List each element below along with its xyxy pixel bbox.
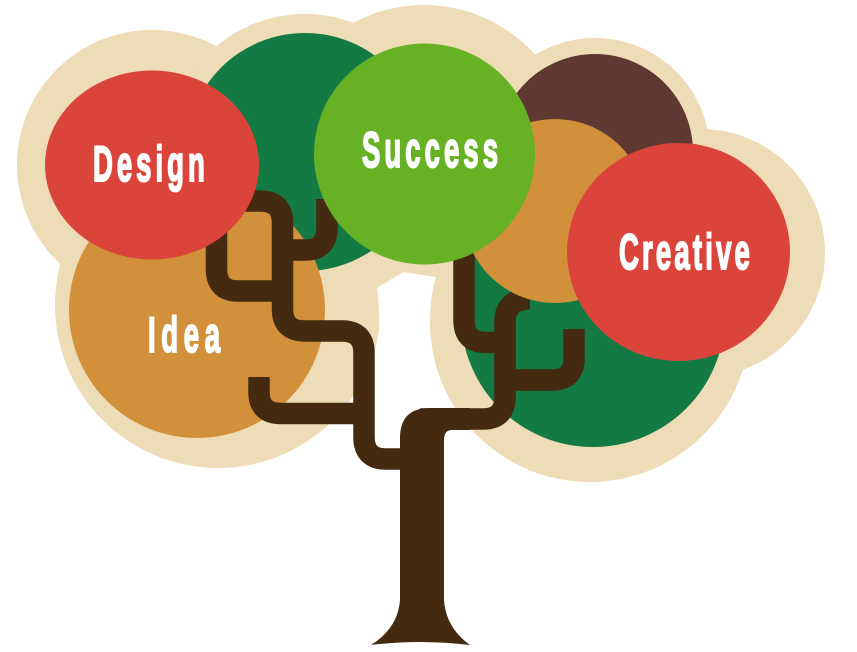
left branches <box>216 199 410 459</box>
orange circle: idea <box>69 182 325 438</box>
branch: left hook right side <box>464 250 505 342</box>
circle: creative <box>567 143 790 361</box>
label: creative: Creative <box>619 223 753 280</box>
dark green circle: top left <box>186 33 424 271</box>
branch: idea hook <box>259 377 364 414</box>
dark green circle: lower right <box>461 183 725 447</box>
trunk <box>371 408 470 645</box>
branch: right main <box>420 299 530 419</box>
label: success: Success <box>362 121 502 178</box>
circle: design <box>45 70 259 260</box>
branch: main left <box>240 201 410 459</box>
branch: top hook <box>282 199 327 250</box>
branch: right hook <box>505 329 574 380</box>
circle: success <box>314 44 535 264</box>
brown circle: top right <box>497 54 693 250</box>
right branches <box>420 250 574 419</box>
label: idea: Idea <box>148 306 226 363</box>
white gap in canopy <box>375 272 455 470</box>
label: design: Design <box>93 135 209 192</box>
branch: design hook <box>216 230 282 291</box>
orange circle: upper right <box>463 119 647 303</box>
cream canopy background <box>17 5 825 482</box>
